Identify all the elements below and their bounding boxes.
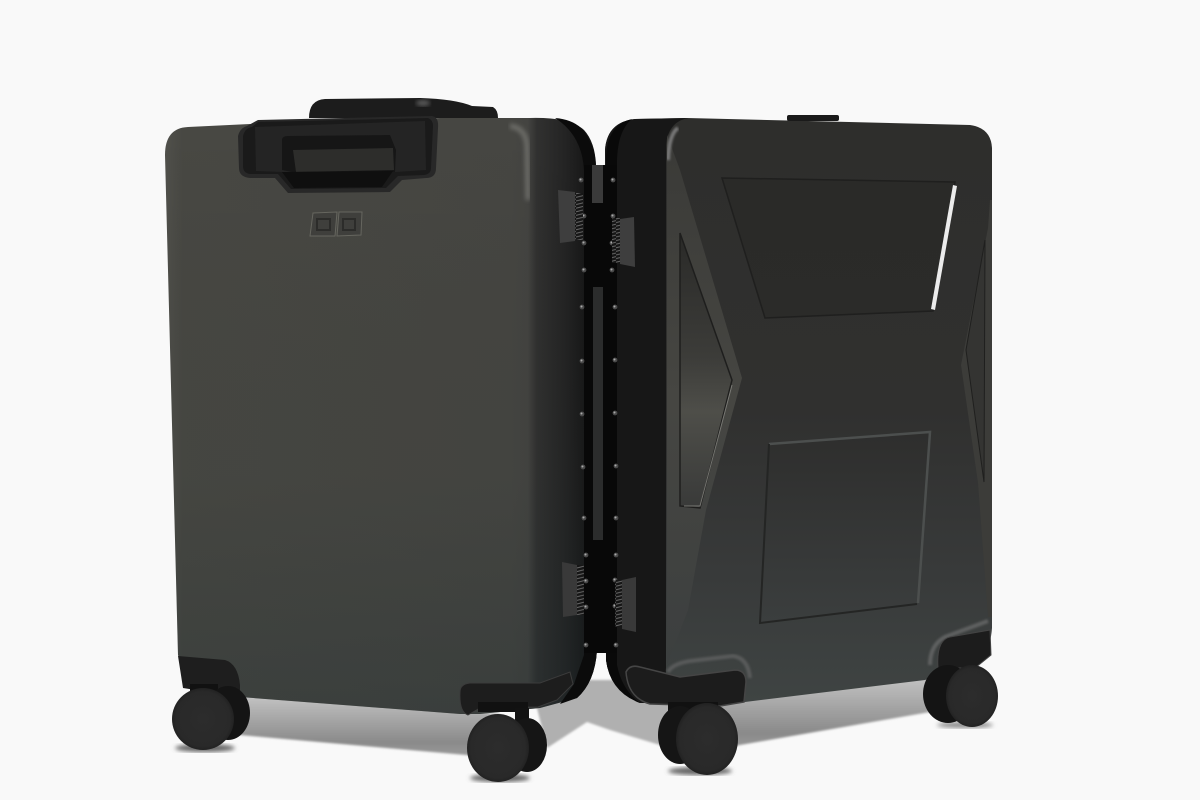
left wheel guard bump [668, 656, 750, 678]
logo emblem [310, 212, 362, 236]
latch on top [787, 115, 839, 121]
left wheel housing lower-left [178, 656, 240, 697]
central hinge with rivets [579, 165, 618, 653]
left arrow panel [680, 233, 732, 508]
hinge clasps [558, 190, 636, 632]
handle recess [282, 135, 396, 172]
wheels [172, 665, 998, 782]
handle grip block [255, 121, 426, 172]
corner highlight [510, 126, 528, 200]
lower panel [760, 433, 930, 623]
aluminium frame [555, 118, 597, 704]
right light facet band [961, 200, 992, 617]
telescopic handle top [309, 98, 498, 118]
wheel: front left [467, 702, 547, 782]
floor shadows [175, 676, 993, 782]
right aluminium frame [606, 119, 640, 703]
upper panel [722, 178, 955, 318]
left light facet band [667, 135, 742, 665]
left suitcase shell [165, 116, 597, 715]
top carry handle [238, 116, 438, 193]
right arrow panel [966, 240, 985, 482]
right shell side [605, 118, 688, 703]
right shell body [605, 118, 992, 703]
right suitcase shell [605, 115, 992, 706]
right wheel housing lower [460, 672, 573, 715]
corner glint [668, 128, 678, 160]
upper panel highlight [931, 185, 957, 310]
left wheel guard [626, 666, 746, 706]
handle lower lip [282, 171, 393, 188]
right wheel guard [938, 630, 991, 668]
wheel: back right [923, 665, 998, 727]
wheel: back left [172, 684, 250, 750]
left shell body [165, 118, 597, 714]
right wheel guard bump [930, 621, 988, 665]
wheel: front right [658, 702, 738, 775]
